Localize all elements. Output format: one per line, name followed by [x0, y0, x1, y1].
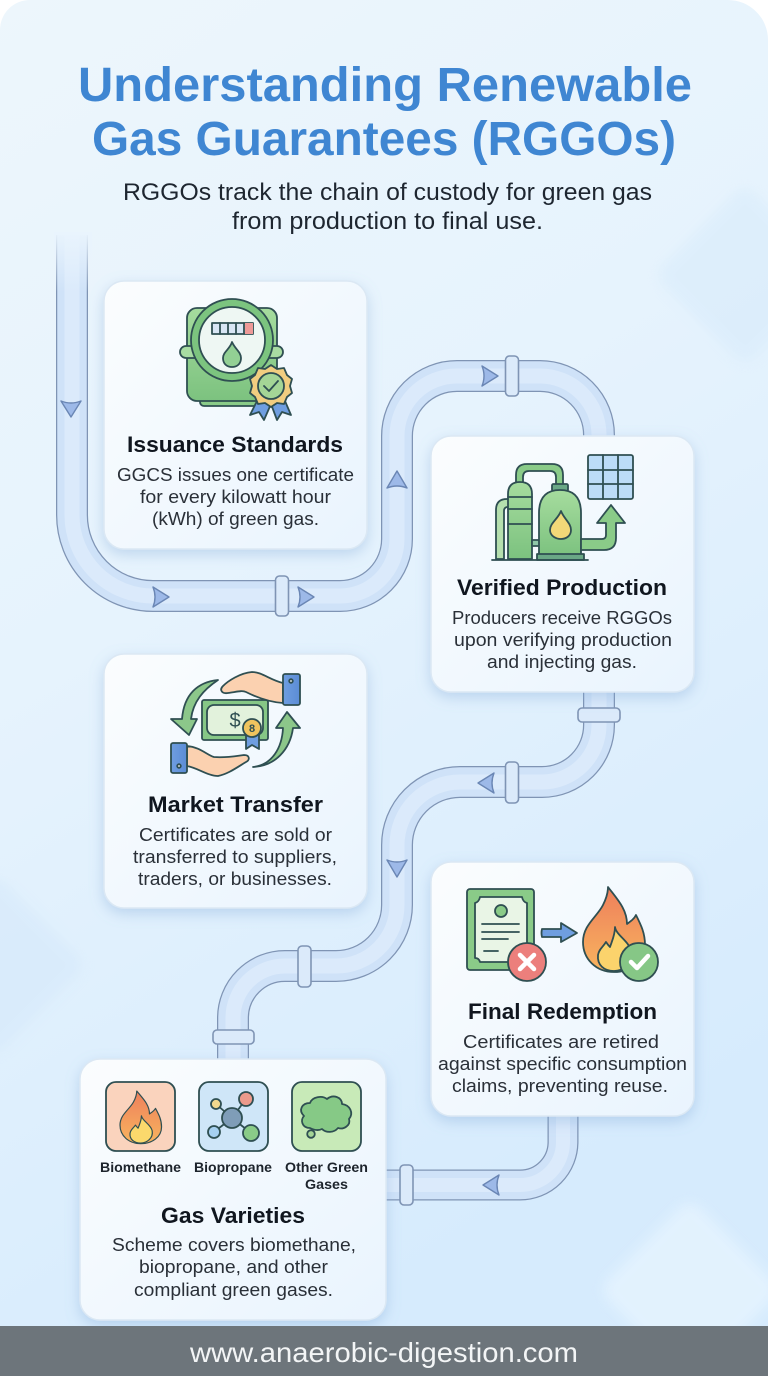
body text — [133, 825, 337, 889]
icon: gas meter with certificate badge — [180, 299, 292, 420]
website url: www.anaerobic-digestion.com — [189, 1337, 578, 1368]
heading: Market Transfer — [148, 792, 323, 817]
heading: Verified Production — [457, 575, 667, 600]
pipeline — [54, 232, 620, 1205]
body text — [452, 608, 672, 672]
heading: Final Redemption — [468, 999, 657, 1024]
icon: retired certificate to flame — [467, 887, 658, 981]
pipe segment: production to varieties — [233, 680, 599, 1070]
label: biopropane: Biopropane — [194, 1160, 272, 1175]
title — [78, 59, 692, 166]
body text: Certificates are retired — [463, 1032, 659, 1052]
subtitle — [123, 179, 652, 235]
icon: hands exchanging certificate money: 8 — [249, 723, 255, 735]
body text — [112, 1235, 356, 1300]
pipe couplers — [213, 356, 620, 1205]
label: other green gases: Other Green — [285, 1160, 368, 1175]
footer bar — [0, 1326, 768, 1376]
label: other green gases — [285, 1160, 368, 1192]
pipe segment: redemption to varieties — [375, 1105, 563, 1185]
icon: gas plant with arrow to certificate grid — [492, 455, 633, 560]
body text — [438, 1032, 687, 1096]
body text: against specific consumption — [438, 1054, 687, 1074]
body text: compliant green gases. — [134, 1280, 333, 1300]
subtitle: RGGOs track the chain of custody for green gas — [123, 179, 652, 206]
flow arrows — [61, 366, 499, 1195]
subtitle: from production to final use. — [232, 208, 543, 235]
body text: upon verifying production — [454, 630, 672, 650]
panel: final redemption — [431, 862, 694, 1116]
body text: (kWh) of green gas. — [152, 509, 319, 529]
icon: biomethane flame — [106, 1082, 175, 1151]
body text: for every kilowatt hour — [140, 487, 331, 507]
icon: green gas cloud — [292, 1082, 361, 1151]
body text: and injecting gas. — [487, 652, 637, 672]
title: Gas Guarantees (RGGOs) — [92, 113, 676, 166]
body text — [117, 465, 354, 529]
body text: Certificates are sold or — [139, 825, 332, 845]
label: other green gases: Gases — [305, 1177, 348, 1192]
panel: verified production — [431, 436, 694, 692]
panel: gas varieties — [80, 1059, 386, 1320]
body text: Scheme covers biomethane, — [112, 1235, 356, 1255]
icon: hands exchanging certificate money: $ — [229, 710, 241, 732]
heading: Issuance Standards — [127, 432, 343, 457]
body text: GGCS issues one certificate — [117, 465, 354, 485]
body text: Producers receive RGGOs — [452, 608, 672, 628]
icon: biopropane molecule — [199, 1082, 268, 1151]
heading: Gas Varieties — [161, 1203, 305, 1228]
label: biomethane: Biomethane — [100, 1160, 182, 1175]
body text: transferred to suppliers, — [133, 847, 337, 867]
icon: hands exchanging certificate money — [171, 672, 300, 776]
panel: market transfer — [104, 654, 367, 908]
body text: claims, preventing reuse. — [452, 1076, 668, 1096]
pipe segment: issuance to production — [54, 232, 599, 596]
body text: biopropane, and other — [139, 1257, 328, 1277]
body text: traders, or businesses. — [138, 869, 332, 889]
title: Understanding Renewable — [78, 59, 692, 112]
panel: issuance standards — [104, 281, 367, 549]
